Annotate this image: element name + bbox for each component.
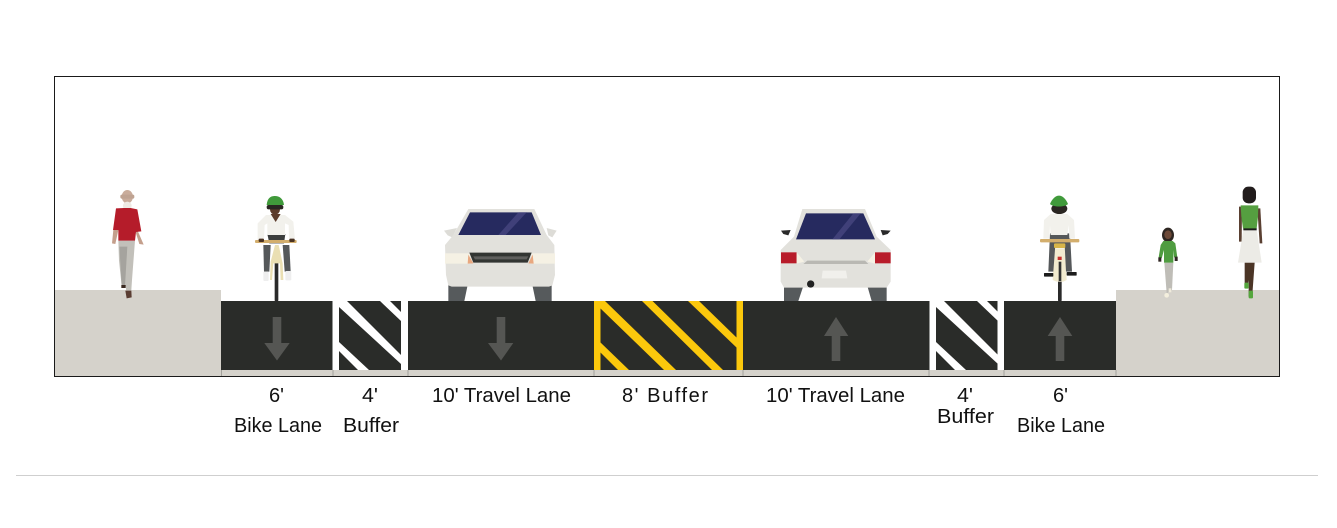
label: right buffer: 4' (957, 385, 973, 407)
label: right bike lane: 6' (1053, 385, 1068, 407)
right buffer: white hatching (930, 301, 1004, 370)
arrow: left travel lane, down (488, 317, 513, 360)
label: right buffer (937, 385, 994, 428)
label: right travel lane: 10' Travel Lane (766, 385, 905, 407)
label: right bike lane: Bike Lane (1017, 415, 1105, 437)
arrow: left bike lane, down (264, 317, 290, 360)
label: left buffer (343, 385, 399, 437)
label: center buffer: 8' Buffer (622, 385, 708, 407)
curb strip below roadway (221, 370, 1116, 376)
left buffer: white hatching (332, 301, 408, 370)
label: left buffer: 4' (362, 385, 378, 407)
figure: cyclist rear view (1040, 196, 1079, 302)
label: right buffer: Buffer (937, 406, 994, 428)
right sidewalk (1116, 290, 1279, 376)
label: right bike lane (1017, 385, 1105, 437)
figure: child walking (1158, 228, 1178, 298)
vehicle: car rear view (781, 209, 891, 301)
arrow: right travel lane, up (824, 317, 848, 361)
label: left bike lane: Bike Lane (234, 415, 322, 437)
figure: man in red sweater (112, 190, 144, 298)
label: left bike lane (234, 385, 322, 437)
label: left travel lane: 10' Travel Lane (432, 385, 571, 407)
figure: cyclist front view (255, 196, 297, 302)
arrow: right bike lane, up (1048, 317, 1072, 361)
label: left bike lane: 6' (269, 385, 284, 407)
roadway surface (221, 301, 1116, 370)
diagram frame (54, 76, 1280, 376)
center buffer: yellow hatching (594, 301, 743, 370)
figure: woman in green top and white skirt (1238, 187, 1262, 298)
left sidewalk (55, 290, 221, 376)
label: left buffer: Buffer (343, 415, 399, 437)
bottom divider rule (16, 475, 1318, 476)
vehicle: car front view (444, 209, 557, 301)
